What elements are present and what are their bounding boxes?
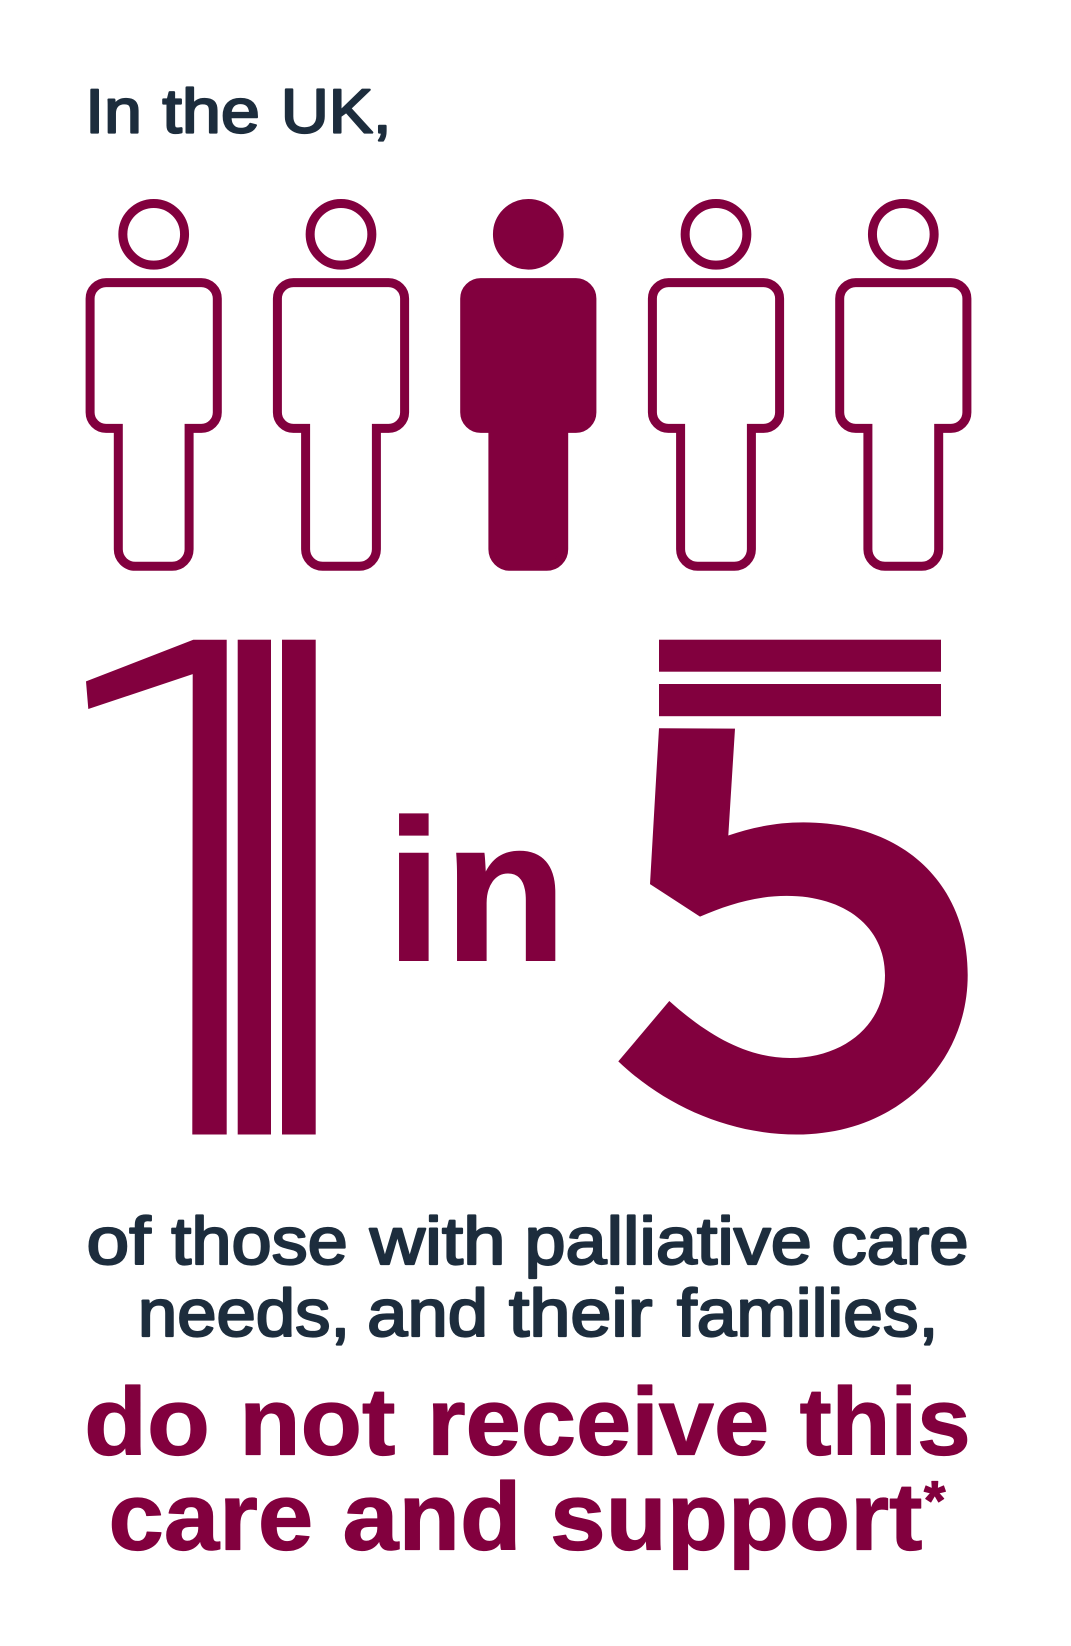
- word: in: in: [386, 778, 567, 1003]
- emphasis text: do not receive this care and support: [84, 1369, 971, 1570]
- heading: In the UK: UK,: [281, 77, 391, 147]
- icon: person outline 2: [277, 203, 405, 566]
- heading: In the UK: In: [85, 77, 142, 147]
- big numeral 1 with stripes: [86, 640, 316, 1134]
- emphasis text: do not receive this care and support: support: [550, 1463, 922, 1570]
- emphasis text: do not receive this care and support: this: [800, 1369, 971, 1476]
- text block: of those with palliative care needs: their: [509, 1276, 652, 1351]
- text block: of those with palliative care needs: with: [369, 1204, 506, 1279]
- text block: of those with palliative care needs: [86, 1204, 968, 1351]
- heading: In the UK: [85, 77, 391, 147]
- text block: of those with palliative care needs: those: [171, 1204, 348, 1279]
- icon: person outline 5: [840, 203, 967, 566]
- text block: of those with palliative care needs: palliative: [524, 1204, 812, 1279]
- text block: of those with palliative care needs: needs,: [138, 1276, 350, 1351]
- emphasis text: do not receive this care and support: not: [239, 1369, 395, 1476]
- icon row: five people, one filled: [90, 203, 967, 566]
- big numeral 5 with stripes: [618, 640, 968, 1134]
- emphasis text: do not receive this care and support: *: [924, 1469, 946, 1531]
- icon: person filled: [465, 203, 592, 566]
- emphasis text: do not receive this care and support: and: [342, 1463, 522, 1570]
- text block: of those with palliative care needs: care: [832, 1204, 968, 1279]
- icon: person outline 1: [90, 203, 217, 566]
- text block: of those with palliative care needs: families,: [677, 1276, 938, 1351]
- emphasis text: do not receive this care and support: receive: [427, 1369, 769, 1476]
- text block: of those with palliative care needs: and: [367, 1276, 488, 1351]
- heading: In the UK: the: [162, 77, 260, 147]
- emphasis text: do not receive this care and support: care: [108, 1463, 313, 1570]
- emphasis text: do not receive this care and support: do: [84, 1369, 210, 1476]
- text block: of those with palliative care needs: of: [86, 1204, 151, 1279]
- icon: person outline 4: [652, 203, 780, 566]
